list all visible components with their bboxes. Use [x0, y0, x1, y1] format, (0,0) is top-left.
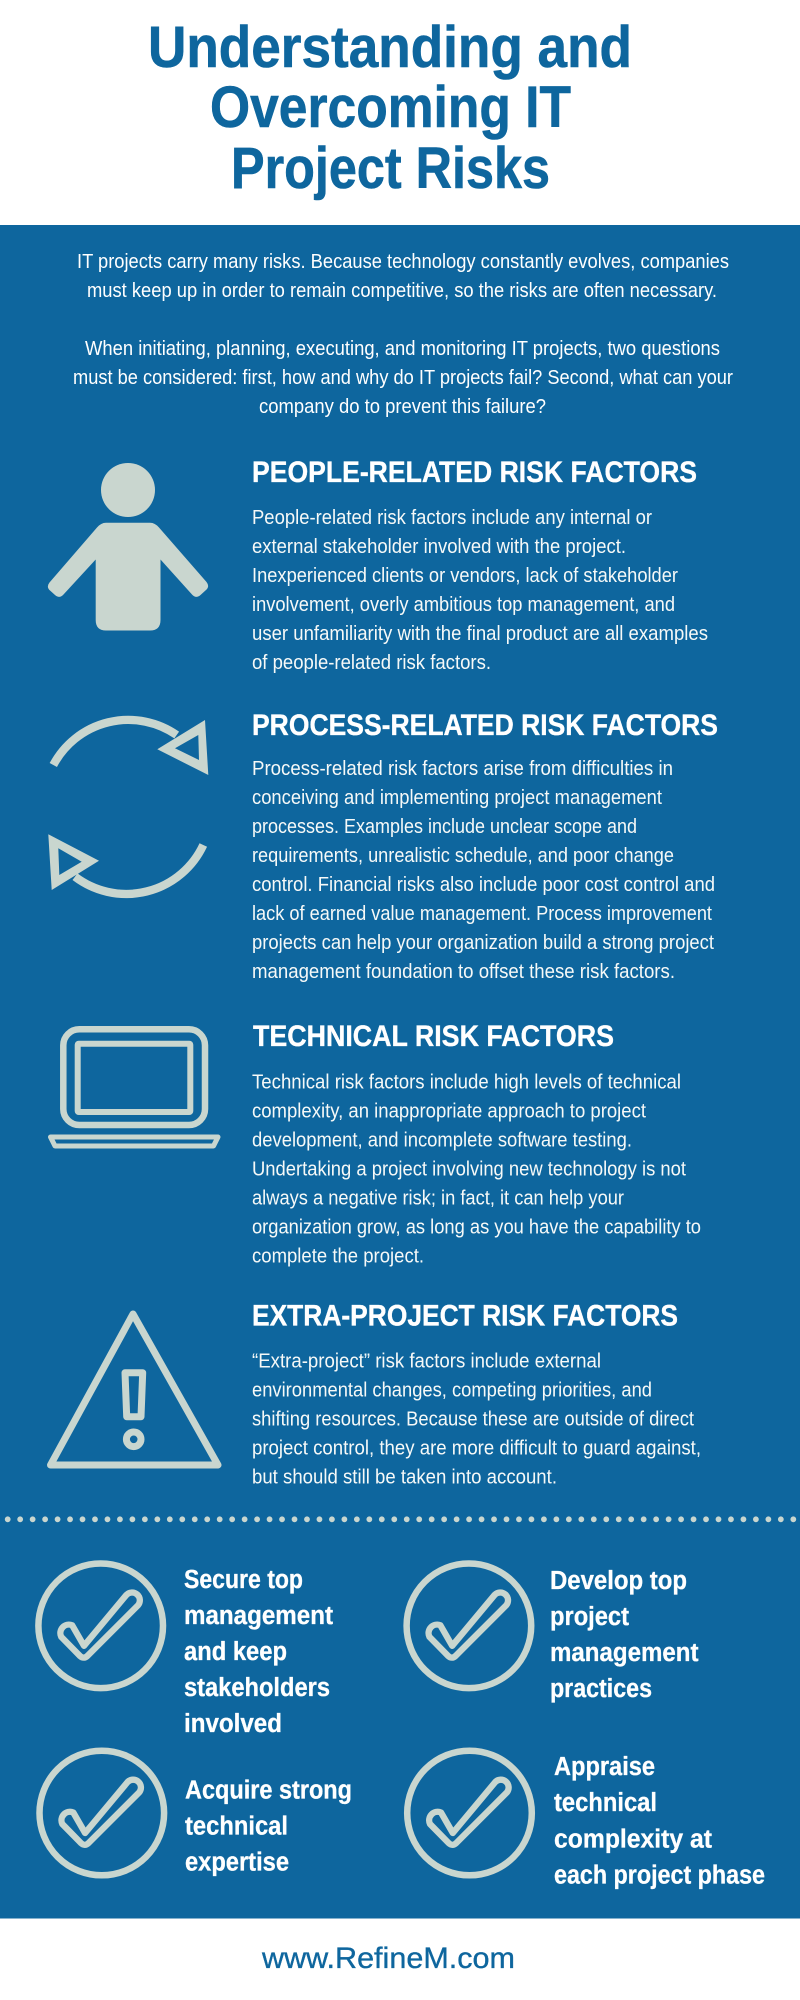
takeaway: acquire expertise: expertise	[185, 1848, 289, 1876]
technical section text: complexity, an inappropriate approach to project	[252, 1100, 646, 1122]
title: Overcoming IT	[210, 75, 571, 140]
extra-project section text: project control, they are more difficult to guard against,	[252, 1437, 701, 1460]
takeaway: develop top practices	[550, 1567, 699, 1703]
icon: check circle 3	[40, 1751, 164, 1875]
people-related section text: involvement, overly ambitious top management, and	[252, 593, 675, 616]
takeaway: secure top management: and keep	[184, 1638, 287, 1666]
technical section text: always a negative risk; in fact, it can help your	[252, 1186, 624, 1210]
title: Project Risks	[231, 136, 550, 201]
technical section text: complete the project.	[252, 1244, 424, 1268]
people-related section text: People-related risk factors include any internal or	[252, 506, 652, 529]
technical section text: Undertaking a project involving new technology is not	[252, 1158, 686, 1180]
takeaway: appraise complexity: Appraise	[554, 1753, 655, 1781]
icon: warning triangle	[50, 1314, 218, 1465]
takeaway: acquire expertise: technical	[185, 1812, 288, 1840]
extra-project section text: shifting resources. Because these are outside of direct	[252, 1408, 694, 1431]
people-related section text: external stakeholder involved with the project.	[252, 535, 626, 558]
icon: cycle arrows	[48, 720, 208, 894]
extra-project section text: “Extra-project” risk factors include external	[252, 1350, 601, 1373]
people-related section text: of people-related risk factors.	[252, 651, 491, 674]
takeaway: secure top management: management	[184, 1602, 333, 1630]
extra-project section text: EXTRA-PROJECT RISK FACTORS	[252, 1300, 678, 1333]
takeaway: secure top management: involved	[184, 1710, 282, 1738]
people-related section text: user unfamiliarity with the final product are all examples	[252, 622, 708, 645]
takeaway: secure top management	[184, 1566, 333, 1738]
title	[148, 15, 632, 201]
footer url: www.RefineM.com	[261, 1942, 515, 1975]
icon: laptop	[50, 1029, 218, 1146]
icon: check circle 1	[38, 1564, 163, 1688]
icon: check circle 2	[407, 1564, 531, 1688]
process-related section text: requirements, unrealistic schedule, and poor change	[252, 844, 674, 867]
takeaway: develop top practices: practices	[550, 1675, 652, 1703]
technical section text: development, and incomplete software testing.	[252, 1128, 632, 1152]
intro text	[73, 250, 733, 418]
takeaway: secure top management: Secure top	[184, 1566, 303, 1594]
icon: check circle 4	[407, 1751, 532, 1875]
technical section text: TECHNICAL RISK FACTORS	[253, 1020, 614, 1053]
intro text: must be considered: first, how and why do IT projects fail? Second, what can your	[73, 366, 733, 389]
extra-project section text	[252, 1300, 701, 1489]
process-related section text: control. Financial risks also include poor cost control and	[252, 873, 715, 896]
takeaway: acquire expertise: Acquire strong	[185, 1776, 352, 1804]
intro text: IT projects carry many risks. Because technology constantly evolves, companies	[77, 250, 729, 273]
takeaway: appraise complexity: technical	[554, 1789, 657, 1817]
intro text: When initiating, planning, executing, and monitoring IT projects, two questions	[85, 337, 720, 360]
process-related section text: management foundation to offset these risk factors.	[252, 960, 675, 983]
people-related section text	[252, 456, 708, 674]
takeaway: appraise complexity: each project phase	[554, 1861, 765, 1889]
technical section text: Technical risk factors include high levels of technical	[252, 1070, 681, 1094]
people-related section text: Inexperienced clients or vendors, lack of stakeholder	[252, 564, 678, 587]
process-related section text	[252, 709, 718, 983]
process-related section text: conceiving and implementing project management	[252, 786, 662, 809]
process-related section text: projects can help your organization build a strong project	[252, 931, 714, 954]
takeaway: develop top practices: management	[550, 1639, 699, 1667]
process-related section text: Process-related risk factors arise from difficulties in	[252, 757, 673, 780]
people-related section text: PEOPLE-RELATED RISK FACTORS	[252, 456, 697, 489]
takeaway: acquire expertise	[185, 1776, 352, 1876]
takeaway: appraise complexity: complexity at	[554, 1825, 712, 1853]
extra-project section text: but should still be taken into account.	[252, 1466, 557, 1489]
title: Understanding and	[148, 15, 632, 80]
takeaway: develop top practices: Develop top	[550, 1567, 687, 1595]
technical section text	[252, 1020, 701, 1268]
extra-project section text: environmental changes, competing priorities, and	[252, 1379, 652, 1402]
process-related section text: processes. Examples include unclear scope and	[252, 815, 637, 838]
intro text: must keep up in order to remain competitive, so the risks are often necessary.	[87, 279, 717, 302]
takeaway: appraise complexity	[554, 1753, 765, 1889]
takeaway: develop top practices: project	[550, 1603, 629, 1631]
intro text: company do to prevent this failure?	[259, 395, 546, 418]
icon: person	[48, 463, 208, 630]
technical section text: organization grow, as long as you have the capability to	[252, 1216, 701, 1238]
process-related section text: PROCESS-RELATED RISK FACTORS	[252, 709, 718, 742]
process-related section text: lack of earned value management. Process improvement	[252, 902, 712, 925]
takeaway: secure top management: stakeholders	[184, 1674, 330, 1702]
